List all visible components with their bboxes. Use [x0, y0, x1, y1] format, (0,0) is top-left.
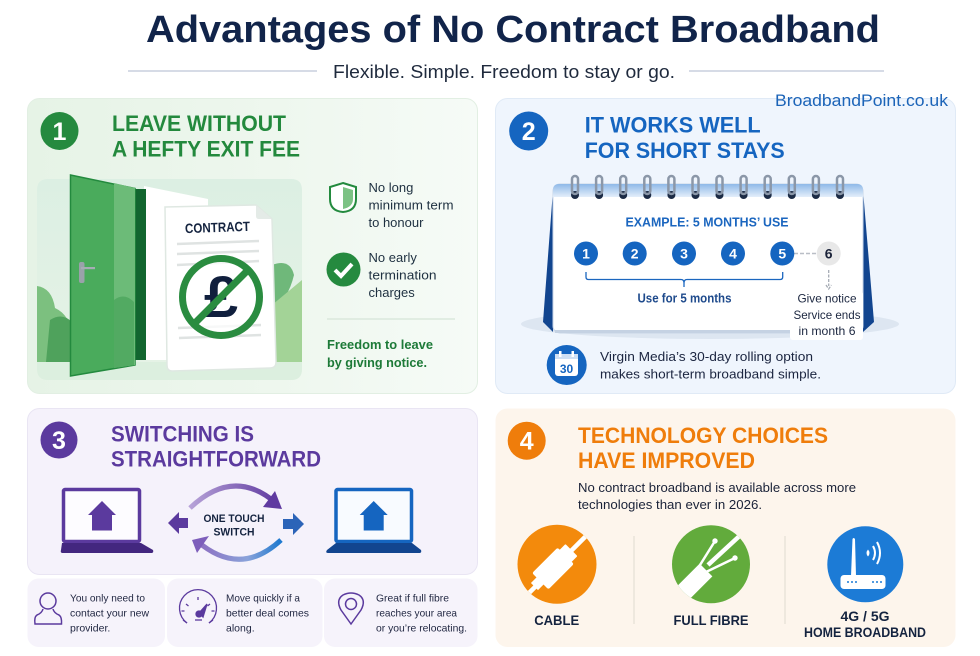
month timeline: 3	[680, 246, 688, 262]
full fibre label: FULL FIBRE	[674, 612, 748, 628]
use for 5 months label: Use for 5 months	[638, 292, 732, 306]
one touch switch label	[204, 513, 265, 539]
contract document: CONTRACT	[185, 219, 251, 236]
number badge 4: 4	[520, 428, 534, 456]
text: no long minimum term: minimum term	[368, 198, 454, 212]
number badge 3: 3	[52, 427, 66, 455]
heading 2: FOR SHORT STAYS	[585, 138, 785, 163]
panel 3: switching	[28, 408, 478, 574]
text: contact provider	[70, 592, 149, 634]
text: freedom to leave: by giving notice.	[327, 355, 427, 370]
icon: 4G/5G router	[827, 526, 903, 602]
give notice note: Give notice	[798, 292, 857, 306]
4G/5G label: HOME BROADBAND	[804, 624, 926, 640]
give notice note: Service ends	[794, 308, 860, 322]
number badge 1: 1	[53, 118, 67, 146]
one touch switch label: SWITCH	[214, 527, 255, 539]
heading 1: A HEFTY EXIT FEE	[112, 136, 300, 162]
icon: gauge	[180, 590, 217, 623]
text: no early termination: charges	[368, 285, 415, 300]
number badge 2	[509, 112, 548, 150]
heading 2	[585, 112, 785, 163]
text: move quickly: along.	[226, 622, 255, 634]
icon: check	[326, 252, 360, 286]
icon: calendar 30	[547, 345, 587, 385]
month timeline: 6	[825, 246, 833, 262]
give notice arrow	[826, 270, 831, 289]
text: great if full fibre: or you’re relocating.	[376, 622, 467, 634]
text: great if full fibre	[376, 592, 467, 634]
contract document	[165, 205, 276, 371]
text: no long minimum term	[368, 180, 454, 230]
month timeline	[574, 242, 841, 266]
4G/5G label	[804, 608, 926, 640]
door handle	[79, 262, 95, 283]
intro text: technologies than ever in 2026.	[578, 497, 762, 512]
text: great if full fibre: Great if full fibre	[376, 592, 449, 604]
text: contact provider: contact your new	[70, 608, 149, 620]
text: freedom to leave	[327, 337, 433, 370]
text: contact provider: provider.	[70, 622, 110, 634]
text: no early termination	[368, 250, 436, 300]
icon: full fibre	[672, 525, 750, 603]
subtitle: Flexible. Simple. Freedom to stay or go.	[333, 61, 675, 82]
icon: cable	[518, 525, 596, 604]
4G/5G label: 4G / 5G	[840, 608, 890, 624]
number badge 2: 2	[522, 118, 536, 146]
text: move quickly: Move quickly if a	[226, 592, 300, 604]
heading 4: TECHNOLOGY CHOICES	[578, 423, 828, 448]
illustration: door and contract	[37, 175, 302, 380]
heading 4	[578, 423, 828, 473]
heading 3	[111, 422, 321, 472]
text: no long minimum term: No long	[368, 180, 413, 195]
icon: location pin	[339, 593, 363, 624]
switch arrows	[168, 486, 304, 559]
icon: shield	[330, 183, 356, 212]
heading 1: LEAVE WITHOUT	[112, 111, 287, 136]
text: virgin media rolling option: makes short-term broadband simple.	[600, 366, 821, 382]
bracket	[586, 272, 783, 287]
example label: EXAMPLE: 5 MONTHS’ USE	[626, 214, 789, 230]
month timeline: 1	[582, 246, 590, 262]
month timeline: 2	[631, 246, 639, 262]
icon: crossed-out pound: £	[204, 265, 238, 330]
text: no long minimum term: to honour	[368, 215, 424, 230]
number badge 4	[508, 422, 546, 460]
text: great if full fibre: reaches your area	[376, 608, 457, 620]
intro text: No contract broadband is available across more	[578, 480, 856, 495]
month timeline: 4	[729, 246, 737, 262]
one touch switch label: ONE TOUCH	[204, 513, 265, 525]
text: virgin media rolling option	[600, 349, 821, 382]
text: freedom to leave: Freedom to leave	[327, 337, 433, 352]
text: move quickly: better deal comes	[226, 608, 309, 620]
card: full fibre relocating	[324, 578, 478, 647]
icon: calendar 30: 30	[560, 362, 573, 376]
text: contact provider: You only need to	[70, 592, 145, 604]
card: move quickly	[167, 578, 322, 647]
give notice note	[790, 291, 863, 340]
icon: person	[35, 593, 62, 624]
desk calendar	[521, 176, 899, 340]
text: no early termination: termination	[368, 268, 436, 282]
icon: crossed-out pound	[182, 258, 260, 336]
intro text	[578, 480, 856, 512]
number badge 3	[40, 422, 78, 458]
heading 4: HAVE IMPROVED	[578, 448, 755, 473]
text: move quickly	[226, 592, 309, 634]
heading 3: SWITCHING IS	[111, 422, 254, 446]
text: virgin media rolling option: Virgin Media’s 30-day rolling option	[600, 349, 813, 364]
card: contact provider	[28, 578, 165, 647]
title: Advantages of No Contract Broadband	[146, 9, 880, 51]
panel 2: short stays	[496, 98, 956, 394]
give notice note: in month 6	[798, 324, 856, 338]
laptop: purple	[61, 490, 153, 553]
cable label: CABLE	[534, 612, 579, 628]
month timeline: 5	[778, 246, 786, 262]
number badge 1	[40, 112, 78, 150]
watermark: BroadbandPoint.co.uk	[775, 91, 949, 110]
heading 2: IT WORKS WELL	[585, 112, 761, 138]
heading 1	[112, 111, 300, 162]
text: no early termination: No early	[368, 250, 417, 265]
panel 4: technology choices	[496, 408, 956, 647]
laptop: blue	[326, 490, 421, 553]
heading 3: STRAIGHTFORWARD	[111, 446, 321, 472]
panel 1: leave without a hefty exit fee	[28, 98, 478, 394]
calendar rings	[571, 176, 844, 199]
